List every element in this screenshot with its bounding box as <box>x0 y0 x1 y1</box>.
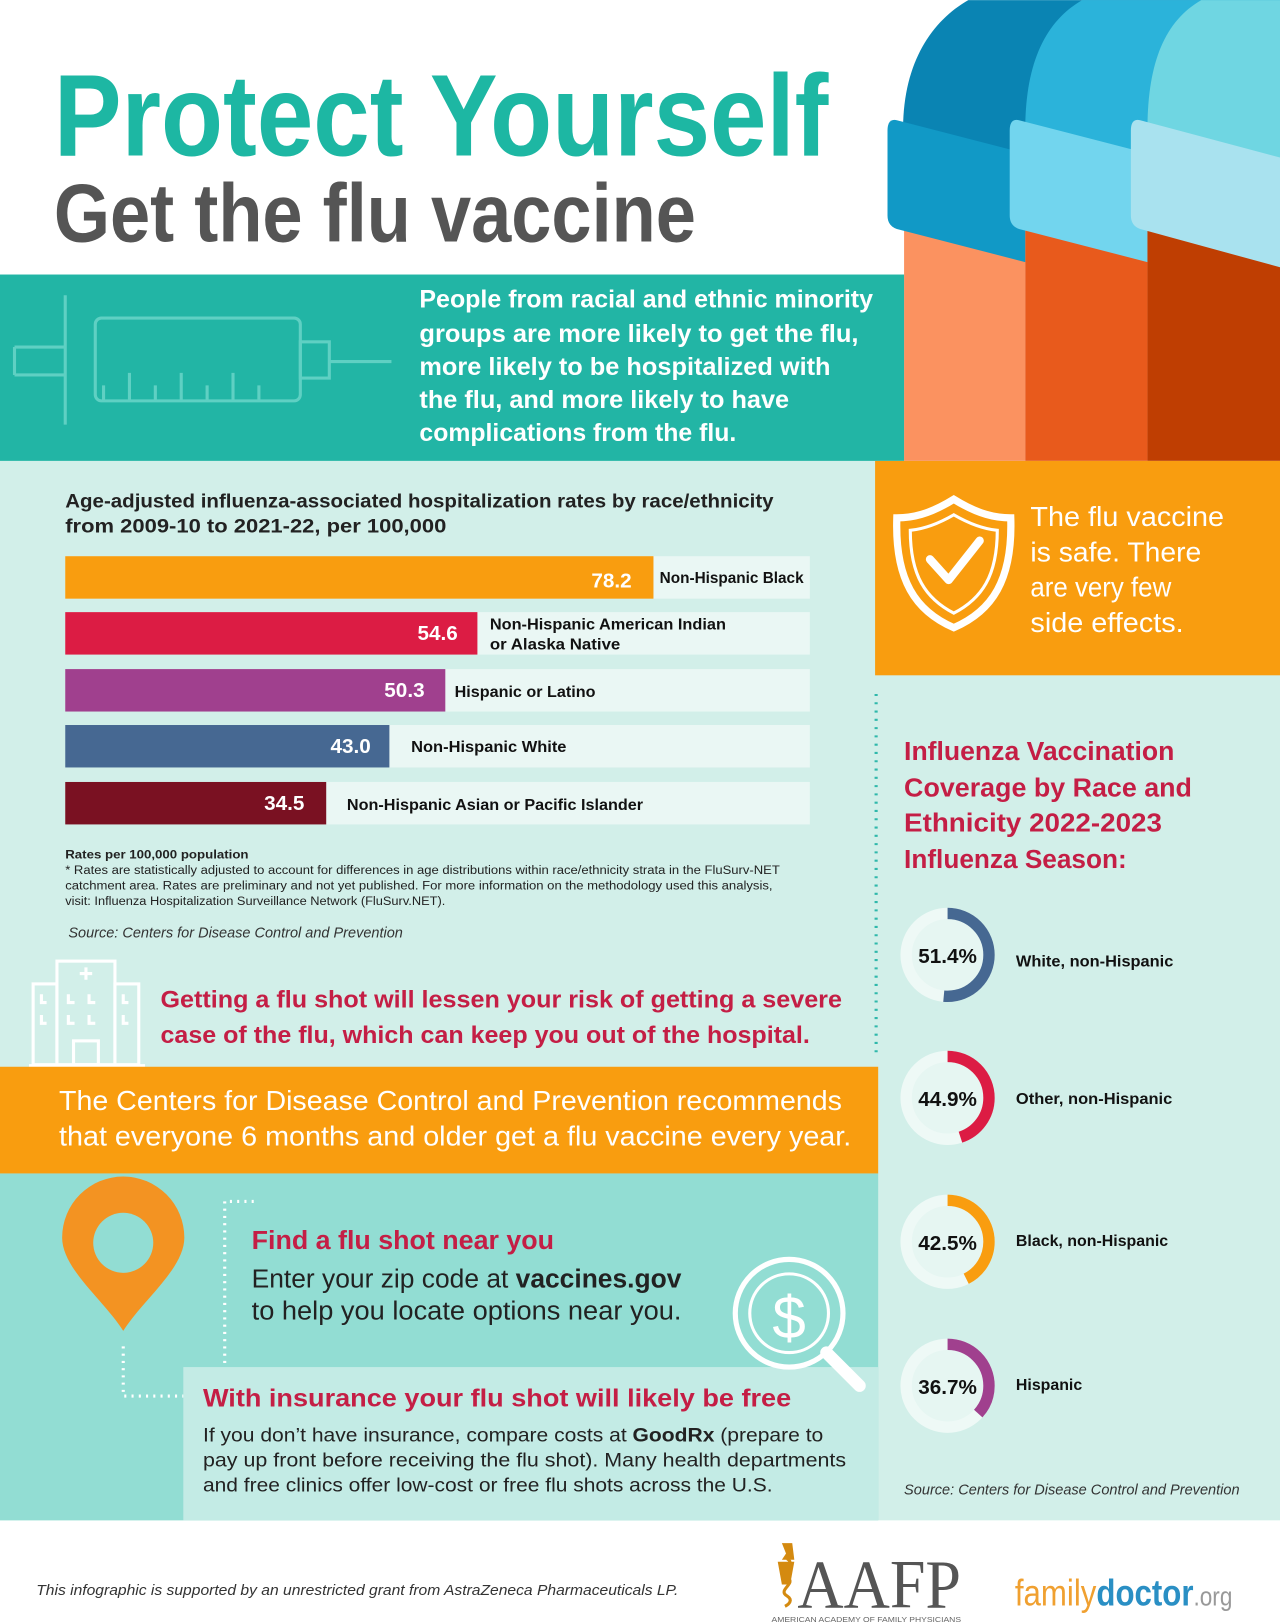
intro text: more likely to be hospitalized with <box>419 354 831 381</box>
panel: CDC recommendation band <box>0 1067 878 1173</box>
donut: white: 51.4% <box>918 945 977 968</box>
icon: magnifier with dollar: $ <box>772 1284 806 1351</box>
footer disclaimer: This infographic is supported by an unrestricted grant from AstraZeneca Pharmaceuticals LP. <box>36 1583 678 1599</box>
bar chart: 34.5 <box>264 792 304 815</box>
donut: black <box>906 1200 1169 1283</box>
subtitle: Get the flu vaccine <box>54 166 696 259</box>
panel: lower teal section <box>0 1173 878 1520</box>
text: find a flu shot: to help you locate options near you. <box>252 1297 681 1325</box>
footnote: visit: Influenza Hospitalization Surveillance Network (FluSurv.NET). <box>65 894 445 908</box>
chart title <box>65 491 774 537</box>
panel: vaccine is safe: is safe. There <box>1030 536 1201 567</box>
bar chart <box>65 556 810 824</box>
chart title: from 2009-10 to 2021-22, per 100,000 <box>65 515 446 537</box>
callout: flu shot lessens risk <box>161 987 842 1049</box>
heading: vaccination coverage: Influenza Season: <box>904 846 1127 874</box>
panel: vaccine is safe <box>875 461 1280 675</box>
heading: vaccination coverage: Coverage by Race and <box>904 774 1192 802</box>
donut: other <box>906 1056 1173 1139</box>
panel: mint chart background <box>0 461 1280 1520</box>
chart title: Age-adjusted influenza-associated hospitalization rates by race/ethnicity <box>65 491 774 513</box>
bar chart: Non-Hispanic Black <box>660 570 804 587</box>
text: insurance: If you don’t have insurance, compare costs at GoodRx (prepare to <box>203 1425 823 1447</box>
source: Source: Centers for Disease Control and Prevention <box>68 925 403 941</box>
panel: insurance inner box <box>183 1367 878 1520</box>
dotted divider <box>875 694 878 1056</box>
donut: white: White, non-Hispanic <box>1016 953 1174 970</box>
bar chart: or Alaska Native <box>490 636 621 653</box>
panel: teal intro band <box>0 275 904 461</box>
title: Protect Yourself <box>54 50 829 180</box>
donut: hispanic <box>906 1344 1083 1427</box>
heading: vaccination coverage: Influenza Vaccination <box>904 738 1174 766</box>
bar chart: Non-Hispanic White <box>411 739 567 756</box>
footnote: Rates per 100,000 population <box>65 848 249 862</box>
text: insurance: pay up front before receiving the flu shot). Many health departments <box>203 1449 846 1471</box>
dotted connectors <box>123 1201 254 1396</box>
text: insurance: With insurance your flu shot will likely be free <box>203 1385 791 1412</box>
source: coverage: Source: Centers for Disease Control and Prevention <box>904 1482 1240 1498</box>
logo: AAFP: AAFP <box>797 1546 961 1622</box>
icon: hospital <box>29 961 145 1066</box>
intro text: the flu, and more likely to have <box>419 387 789 414</box>
donut: hispanic: 36.7% <box>918 1376 977 1399</box>
callout: flu shot lessens risk: case of the flu, which can keep you out of the hospital. <box>161 1022 810 1049</box>
donut: black: Black, non-Hispanic <box>1016 1233 1169 1250</box>
text: insurance <box>203 1385 846 1496</box>
icon: magnifier with dollar <box>735 1259 860 1386</box>
heading: vaccination coverage <box>904 738 1192 874</box>
footnote <box>65 848 780 908</box>
panel: vaccine is safe: The flu vaccine <box>1030 501 1224 532</box>
donut: other: Other, non-Hispanic <box>1016 1091 1173 1108</box>
logo: AAFP: AMERICAN ACADEMY OF FAMILY PHYSICIANS <box>772 1615 961 1624</box>
callout: flu shot lessens risk: Getting a flu shot will lessen your risk of getting a severe <box>161 987 842 1014</box>
donut: white <box>906 913 1174 996</box>
heading: vaccination coverage: Ethnicity 2022-2023 <box>904 810 1162 838</box>
bar chart: 43.0 <box>330 735 371 758</box>
intro text: People from racial and ethnic minority <box>419 287 873 314</box>
icon: shield check <box>897 499 1011 628</box>
intro text: complications from the flu. <box>419 420 736 447</box>
panel: vaccine is safe: are very few <box>1030 572 1172 603</box>
icon: location pin <box>62 1177 184 1331</box>
bar chart: 50.3 <box>384 679 425 702</box>
text: find a flu shot: Find a flu shot near you <box>252 1227 554 1255</box>
text: find a flu shot: Enter your zip code at vaccines.gov <box>252 1265 682 1293</box>
bar chart: 54.6 <box>417 622 458 645</box>
intro text: groups are more likely to get the flu, <box>419 321 859 348</box>
panel: vaccine is safe: side effects. <box>1030 607 1184 638</box>
panel: CDC recommendation band: The Centers for Disease Control and Prevention recommends <box>59 1085 842 1116</box>
bar chart: Non-Hispanic American Indian <box>490 617 726 634</box>
bar chart: Hispanic or Latino <box>455 684 595 701</box>
text: find a flu shot <box>252 1227 682 1325</box>
footnote: * Rates are statistically adjusted to account for differences in age distributions within race/ethnicity strata in the FluSurv-NET <box>65 863 780 877</box>
donut: other: 44.9% <box>918 1088 977 1111</box>
footnote: catchment area. Rates are preliminary and not yet published. For more information on the methodology used this analysis, <box>65 879 773 893</box>
donut: hispanic: Hispanic <box>1016 1377 1083 1394</box>
logo: familydoctor.org: familydoctor.org <box>1015 1571 1232 1613</box>
panel: CDC recommendation band: that everyone 6 months and older get a flu vaccine every year. <box>59 1120 851 1151</box>
graphic: vaccine vials top right <box>888 0 1280 461</box>
icon: syringe outline <box>14 295 391 425</box>
intro text <box>419 287 873 447</box>
bar chart: Non-Hispanic Asian or Pacific Islander <box>347 797 643 814</box>
donut: black: 42.5% <box>918 1232 977 1255</box>
text: insurance: and free clinics offer low-cost or free flu shots across the U.S. <box>203 1474 773 1496</box>
bar chart: 78.2 <box>591 569 632 592</box>
